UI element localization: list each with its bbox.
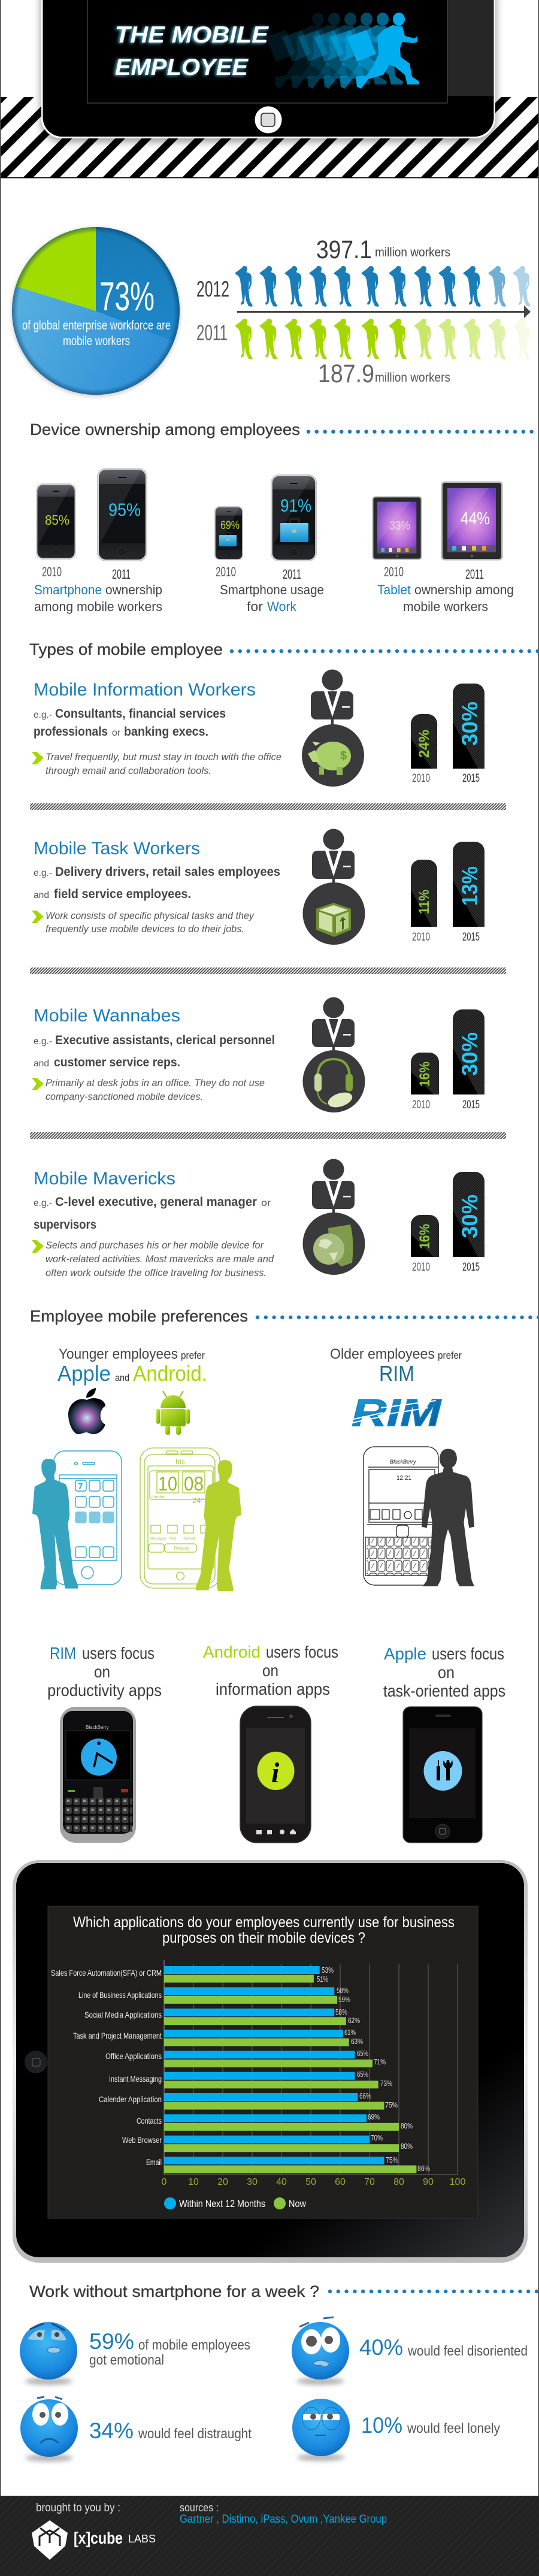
axis numbers: 0 bbox=[162, 2177, 167, 2187]
text: 40% bbox=[359, 2335, 403, 2360]
chart title bbox=[73, 1914, 455, 1946]
phone 2011: 91%: 91% bbox=[280, 496, 311, 516]
panel: mobile wannabes bbox=[32, 997, 485, 1112]
sketch: htc phone: htc bbox=[175, 1458, 185, 1466]
pie chart: 73% bbox=[12, 227, 180, 396]
caption: on bbox=[94, 1662, 110, 1681]
legend: Now bbox=[289, 2198, 307, 2209]
description bbox=[32, 751, 281, 776]
category labels: Office Applications bbox=[105, 2051, 162, 2061]
tablet frame bbox=[41, 0, 495, 138]
caption: ownership among bbox=[414, 582, 514, 597]
bars: now bbox=[164, 1975, 416, 2173]
heading: types of mobile employee: Types of mobile employee bbox=[29, 640, 223, 658]
value labels: 75% bbox=[386, 2155, 398, 2164]
axis numbers: 40 bbox=[276, 2177, 287, 2187]
caption: Smartphone usage bbox=[220, 582, 324, 597]
examples: C-level executive, general manager bbox=[55, 1195, 257, 1209]
icon: person with piggy bank: $ bbox=[340, 749, 347, 763]
axis numbers: 80 bbox=[393, 2177, 404, 2187]
heading: Mobile Task Workers bbox=[34, 839, 200, 858]
examples: e.g.- bbox=[34, 868, 52, 878]
examples: and bbox=[34, 890, 49, 900]
examples: professionals bbox=[34, 725, 108, 739]
logo: RIM: RIM bbox=[352, 1391, 442, 1434]
logo: [x]cube labs: LABS bbox=[128, 2533, 156, 2545]
heading: device ownership: Device ownership among employees bbox=[30, 421, 300, 439]
bar chart: share of workforce: 24% bbox=[416, 730, 432, 758]
axis numbers bbox=[162, 2177, 465, 2187]
panel: android users bbox=[203, 1643, 338, 1843]
description: Travel frequently, but must stay in touch with the office bbox=[46, 751, 281, 763]
tablet with applications chart bbox=[13, 1860, 528, 2263]
phone: android with info icon: i bbox=[271, 1757, 280, 1789]
icon: android robot bbox=[156, 1391, 190, 1435]
bar chart: share of workforce: 2015 bbox=[462, 931, 480, 944]
silhouette: dark employee bbox=[422, 1449, 474, 1586]
legend: Within Next 12 Months bbox=[179, 2198, 265, 2209]
logo: [x]cube labs: [x]cube bbox=[74, 2529, 123, 2547]
2012 count: million workers bbox=[375, 246, 450, 259]
caption: prefer bbox=[181, 1350, 205, 1361]
text: 10% bbox=[361, 2413, 402, 2438]
caption: RIM bbox=[50, 1644, 76, 1662]
panel: older employees bbox=[330, 1346, 474, 1586]
value labels: 59% bbox=[338, 1995, 350, 2004]
legend bbox=[164, 2197, 307, 2209]
caption bbox=[383, 1644, 505, 1700]
2011 count: 187.9 bbox=[318, 359, 374, 388]
panel: apple users bbox=[383, 1644, 505, 1843]
description: frequently use mobile devices to do their jobs. bbox=[46, 923, 244, 935]
examples bbox=[34, 865, 280, 901]
caption: Work bbox=[267, 599, 297, 614]
text: got emotional bbox=[89, 2352, 164, 2368]
value labels bbox=[317, 1966, 430, 2173]
description bbox=[32, 1077, 265, 1102]
panel: distraught bbox=[20, 2397, 252, 2462]
category labels: Instant Messaging bbox=[109, 2074, 162, 2084]
sources: sources : bbox=[180, 2502, 219, 2514]
silhouette: blue employee bbox=[32, 1459, 78, 1589]
axis numbers: 20 bbox=[217, 2177, 228, 2187]
description bbox=[32, 910, 255, 935]
caption bbox=[57, 1346, 207, 1386]
sources bbox=[180, 2502, 387, 2526]
header bbox=[0, 0, 539, 179]
year labels: 2010 bbox=[216, 564, 236, 579]
axis numbers: 90 bbox=[423, 2177, 434, 2187]
bar chart: share of workforce: 16% bbox=[417, 1062, 433, 1087]
tablet 2011: 44%: 44% bbox=[461, 509, 490, 528]
striped band bbox=[0, 97, 539, 179]
examples: or bbox=[112, 728, 121, 738]
category labels: Email bbox=[146, 2157, 162, 2167]
bar chart: share of workforce: 11% bbox=[416, 890, 432, 914]
footer bbox=[0, 2496, 539, 2576]
examples: e.g.- bbox=[34, 710, 52, 720]
description: Work consists of specific physical tasks and they bbox=[46, 910, 255, 921]
phone 2011: 91% bbox=[271, 474, 317, 561]
value labels: 70% bbox=[371, 2133, 383, 2142]
examples: Delivery drivers, retail sales employees bbox=[55, 865, 280, 879]
bar chart: share of workforce: 2010 bbox=[412, 1099, 430, 1111]
caption: among mobile workers bbox=[34, 599, 162, 614]
icon: apple logo bbox=[68, 1388, 105, 1434]
caption: task-oriented apps bbox=[383, 1682, 505, 1700]
value labels: 65% bbox=[357, 2070, 368, 2079]
caption: Tablet bbox=[377, 582, 411, 597]
value labels: 86% bbox=[417, 2164, 430, 2173]
heading: work without smartphone: Work without smartphone for a week ? bbox=[29, 2282, 319, 2300]
caption bbox=[330, 1346, 462, 1386]
description: through email and collaboration tools. bbox=[46, 765, 211, 776]
panel: emotional bbox=[20, 2322, 250, 2385]
caption: users focus bbox=[266, 1643, 338, 1661]
arrow bbox=[237, 306, 531, 318]
caption bbox=[220, 582, 324, 614]
phone 2010: 69%: 69% bbox=[220, 519, 240, 532]
bar chart: share of workforce: 2015 bbox=[462, 772, 480, 785]
caption bbox=[34, 582, 162, 614]
year labels bbox=[216, 564, 301, 582]
value labels: 73% bbox=[380, 2079, 392, 2088]
panel: disoriented bbox=[292, 2317, 528, 2385]
phone 2010: 69% bbox=[214, 506, 243, 560]
year labels: 2011 bbox=[465, 567, 484, 582]
value labels: 75% bbox=[385, 2100, 398, 2109]
caption: Smartphone bbox=[34, 582, 102, 597]
phone: blackberry with clock icon: BlackBerry bbox=[86, 1725, 109, 1730]
value labels: 53% bbox=[322, 1966, 334, 1975]
heading: Mobile Wannabes bbox=[34, 1006, 180, 1026]
credit: brought to you by : bbox=[36, 2502, 120, 2514]
icon: crying face bbox=[20, 2322, 77, 2385]
text bbox=[361, 2413, 500, 2438]
phone: android with info icon bbox=[240, 1706, 311, 1843]
phone 2011: 95%: 95% bbox=[108, 500, 141, 520]
caption: Android bbox=[203, 1643, 261, 1661]
year labels: 2011 bbox=[112, 567, 131, 582]
bar chart: share of workforce: 2015 bbox=[462, 1099, 480, 1111]
category labels: Sales Force Automation(SFA) or CRM bbox=[51, 1968, 162, 1978]
value labels: 71% bbox=[374, 2057, 386, 2066]
panel: mobile mavericks bbox=[32, 1159, 485, 1278]
text bbox=[89, 2418, 252, 2443]
caption: productivity apps bbox=[47, 1681, 162, 1700]
category labels: Contacts bbox=[137, 2116, 162, 2125]
bar chart bbox=[51, 1960, 465, 2187]
phone 2011: 95% bbox=[97, 468, 147, 561]
title: THE MOBILE bbox=[115, 22, 269, 48]
row of green workers bbox=[235, 319, 531, 359]
caption: on bbox=[438, 1663, 455, 1682]
icon: bored face bbox=[292, 2399, 350, 2461]
bar chart: share of workforce: 13% bbox=[458, 866, 482, 906]
2011 count bbox=[318, 359, 450, 388]
examples: e.g.- bbox=[34, 1036, 52, 1047]
value labels: 63% bbox=[351, 2037, 363, 2046]
sketch: blackberry: BlackBerry bbox=[390, 1459, 416, 1465]
text: would feel lonely bbox=[407, 2420, 500, 2436]
icon: person with piggy bank bbox=[302, 670, 364, 787]
category labels: Calender Application bbox=[99, 2094, 162, 2104]
bar chart: share of workforce bbox=[411, 1009, 485, 1111]
description: Primarily at desk jobs in an office. They do not use bbox=[46, 1077, 265, 1089]
examples: Consultants, financial services bbox=[55, 707, 226, 721]
tablet 2011: 44% bbox=[441, 482, 503, 561]
examples: banking execs. bbox=[124, 725, 208, 739]
axis numbers: 10 bbox=[188, 2177, 199, 2187]
bar chart: share of workforce bbox=[411, 1172, 485, 1274]
sketch: htc phone: Internet bbox=[183, 1537, 195, 1541]
silhouette: green employee bbox=[196, 1460, 241, 1591]
caption: users focus bbox=[432, 1644, 504, 1663]
caption: Older employees bbox=[330, 1346, 435, 1362]
caption: ownership bbox=[105, 582, 162, 597]
2012 count bbox=[316, 235, 450, 264]
icon: worried face bbox=[292, 2317, 349, 2385]
axis numbers: 60 bbox=[335, 2177, 346, 2187]
bar chart: share of workforce: 2015 bbox=[462, 1261, 480, 1274]
sketch: htc phone: 08 bbox=[184, 1473, 204, 1495]
sketch: blackberry bbox=[364, 1447, 438, 1585]
text: 34% bbox=[89, 2418, 134, 2443]
sketch: htc phone: Mail bbox=[169, 1537, 176, 1541]
year labels: 2011 bbox=[283, 567, 301, 582]
caption: mobile workers bbox=[403, 599, 488, 614]
title: EMPLOYEE bbox=[115, 55, 249, 80]
examples: customer service reps. bbox=[54, 1056, 180, 1069]
sketch: iphone: 7 bbox=[78, 1481, 83, 1492]
value labels: 51% bbox=[317, 1975, 328, 1984]
value labels: 58% bbox=[335, 2007, 347, 2016]
text: 59% bbox=[89, 2329, 134, 2354]
caption: Apple bbox=[384, 1644, 426, 1663]
examples bbox=[34, 707, 226, 739]
description bbox=[32, 1239, 274, 1278]
examples bbox=[34, 1033, 275, 1069]
bar chart: share of workforce: 2010 bbox=[412, 931, 430, 944]
sketch: htc phone bbox=[140, 1448, 220, 1588]
text: would feel distraught bbox=[138, 2426, 252, 2441]
heading: Mobile Information Workers bbox=[34, 680, 256, 700]
pie chart: 73%: mobile workers bbox=[63, 334, 130, 348]
text bbox=[89, 2329, 250, 2368]
chart panel bbox=[48, 1906, 478, 2218]
bars: within next 12 months bbox=[164, 1966, 384, 2164]
heading: employee mobile preferences: Employee mobile preferences bbox=[30, 1307, 248, 1325]
sketch: blackberry: 12:21 bbox=[396, 1475, 411, 1481]
icon: person with backpack and globe bbox=[303, 1159, 365, 1275]
value labels: 61% bbox=[344, 2028, 356, 2037]
axis numbers: 50 bbox=[305, 2177, 316, 2187]
panel: younger employees bbox=[32, 1346, 241, 1591]
year 2012: 2012 bbox=[196, 277, 229, 301]
row of blue workers bbox=[235, 266, 531, 307]
sources: Gartner , Distimo, iPass, Ovum ,Yankee Group bbox=[180, 2513, 387, 2526]
phone: blackberry with clock icon bbox=[60, 1707, 136, 1843]
2011 count: million workers bbox=[375, 371, 450, 385]
sketch: htc phone: Phone bbox=[174, 1546, 189, 1552]
text: would feel disoriented bbox=[407, 2343, 528, 2359]
category labels: Social Media Applications bbox=[84, 2010, 162, 2019]
category labels: Task and Project Management bbox=[73, 2031, 162, 2040]
icon: running employee with motion trail bbox=[266, 13, 419, 89]
sketch: htc phone: 24° bbox=[192, 1496, 204, 1505]
description: Selects and purchases his or her mobile device for bbox=[46, 1239, 264, 1251]
panel: mobile task workers bbox=[32, 829, 485, 945]
icon: person with parcel bbox=[303, 829, 365, 945]
caption: Apple bbox=[57, 1361, 111, 1386]
description: work-related activities. Most mavericks are male and bbox=[46, 1253, 274, 1265]
tablet 2010: 33%: 33% bbox=[389, 519, 410, 533]
examples: Executive assistants, clerical personnel bbox=[55, 1033, 275, 1047]
category labels bbox=[51, 1968, 162, 2167]
caption: and bbox=[115, 1373, 129, 1383]
bar chart: share of workforce bbox=[411, 842, 485, 944]
value labels: 80% bbox=[401, 2142, 413, 2151]
year labels bbox=[384, 564, 484, 582]
caption: Android. bbox=[133, 1361, 207, 1386]
bar chart: share of workforce bbox=[411, 684, 485, 785]
2012 count: 397.1 bbox=[316, 235, 372, 264]
axis numbers: 100 bbox=[450, 2177, 465, 2187]
value labels: 66% bbox=[359, 2091, 371, 2100]
caption: on bbox=[262, 1661, 278, 1680]
category labels: Line of Business Applications bbox=[78, 1990, 162, 2000]
bar chart: share of workforce: 30% bbox=[458, 1195, 482, 1238]
phone: iphone with tools icon bbox=[403, 1707, 482, 1843]
year 2011: 2011 bbox=[196, 321, 228, 345]
axis numbers: 30 bbox=[247, 2177, 258, 2187]
panel: rim users bbox=[47, 1644, 162, 1843]
caption: Younger employees bbox=[59, 1346, 178, 1362]
caption bbox=[377, 582, 514, 614]
workers comparison bbox=[196, 235, 531, 388]
sketch: htc phone: 10 bbox=[158, 1473, 177, 1495]
phone 2010: 85%: 85% bbox=[45, 512, 69, 528]
bar chart: share of workforce: 30% bbox=[458, 702, 482, 746]
caption: information apps bbox=[216, 1680, 330, 1698]
caption: prefer bbox=[438, 1350, 462, 1361]
chart title: purposes on their mobile devices ? bbox=[162, 1930, 365, 1946]
tablet frame bbox=[13, 1860, 528, 2263]
text: of mobile employees bbox=[138, 2337, 250, 2353]
text bbox=[359, 2335, 528, 2360]
examples: e.g.- bbox=[34, 1198, 52, 1208]
examples bbox=[34, 1195, 271, 1232]
sketch: iphone bbox=[54, 1451, 122, 1585]
tablet 2010: 33% bbox=[372, 496, 422, 560]
value labels: 65% bbox=[357, 2049, 368, 2058]
year labels: 2010 bbox=[42, 564, 62, 579]
bar chart: share of workforce: 30% bbox=[458, 1032, 482, 1076]
value labels: 62% bbox=[348, 2016, 360, 2025]
value labels: 58% bbox=[337, 1986, 349, 1995]
examples: field service employees. bbox=[54, 887, 191, 901]
axis numbers: 70 bbox=[364, 2177, 375, 2187]
bar chart: share of workforce: 16% bbox=[417, 1224, 433, 1249]
icon: sad face bbox=[20, 2397, 78, 2462]
bar chart: share of workforce: 2010 bbox=[412, 1261, 430, 1274]
panel: tablet ownership bbox=[372, 482, 514, 614]
icon: person with headset and mouse bbox=[303, 997, 365, 1112]
value labels: 80% bbox=[401, 2121, 413, 2130]
logo: [x]cube labs bbox=[32, 2520, 156, 2560]
caption: for bbox=[247, 599, 263, 614]
heading: Mobile Mavericks bbox=[34, 1169, 175, 1189]
title bbox=[115, 22, 269, 80]
caption: RIM bbox=[379, 1361, 414, 1386]
pie chart: 73%: 73% bbox=[99, 274, 155, 319]
examples: and bbox=[34, 1059, 49, 1069]
description: often work outside the office traveling for business. bbox=[46, 1267, 267, 1278]
bar chart: share of workforce: 2010 bbox=[412, 772, 430, 785]
caption: users focus bbox=[82, 1644, 155, 1662]
caption bbox=[203, 1643, 338, 1698]
caption bbox=[47, 1644, 162, 1700]
category labels: Web Browser bbox=[122, 2135, 162, 2145]
value labels: 69% bbox=[368, 2112, 380, 2121]
examples: or bbox=[261, 1198, 271, 1208]
description: company-sanctioned mobile devices. bbox=[46, 1091, 203, 1102]
year labels: 2010 bbox=[384, 564, 404, 579]
panel: mobile information workers bbox=[32, 670, 485, 787]
panel: smartphone ownership bbox=[34, 468, 162, 614]
panel: lonely bbox=[292, 2399, 500, 2461]
sketch: htc phone: Messages bbox=[150, 1537, 166, 1541]
year labels bbox=[42, 564, 131, 582]
examples: supervisors bbox=[34, 1218, 96, 1232]
sketch: htc phone: London bbox=[152, 1495, 165, 1499]
phone 2010: 85% bbox=[36, 483, 76, 560]
pie chart: 73%: of global enterprise workforce are bbox=[22, 319, 171, 332]
panel: smartphone usage for work bbox=[214, 474, 324, 614]
chart title: Which applications do your employees currently use for business bbox=[73, 1914, 455, 1931]
